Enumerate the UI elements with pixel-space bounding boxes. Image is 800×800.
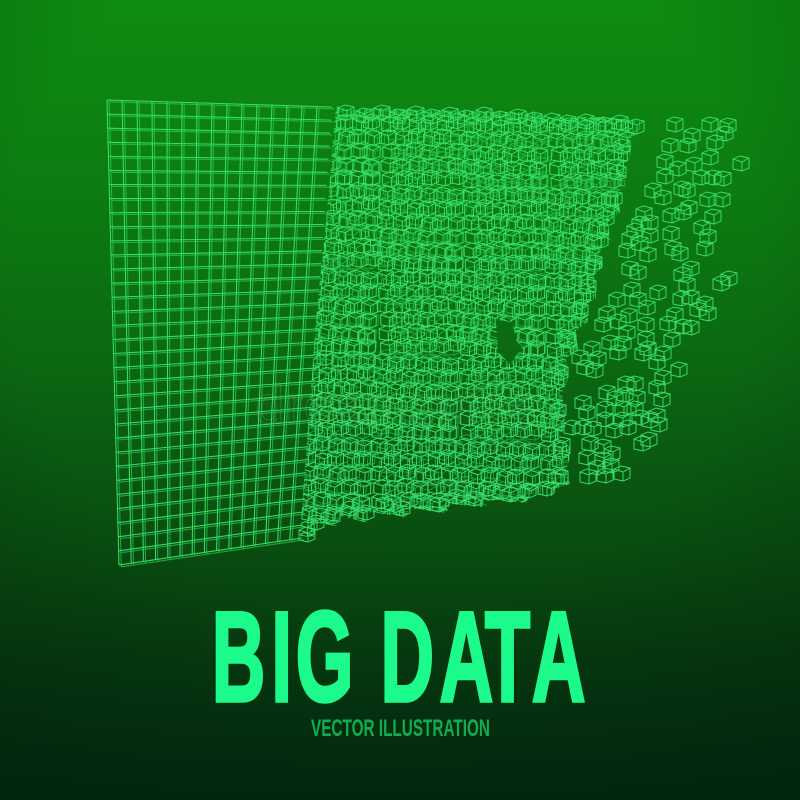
clipped cube tiles xyxy=(300,106,640,537)
faint watermark: dreamstime xyxy=(255,376,540,435)
wireframe grid wall xyxy=(107,100,334,567)
scattered cubes xyxy=(564,117,749,484)
infographic artwork xyxy=(106,100,750,736)
edge cubes xyxy=(299,105,644,542)
dense cube field xyxy=(298,104,644,542)
subtitle: VECTOR ILLUSTRATION xyxy=(311,715,490,742)
title: BIG DATA xyxy=(212,586,585,729)
